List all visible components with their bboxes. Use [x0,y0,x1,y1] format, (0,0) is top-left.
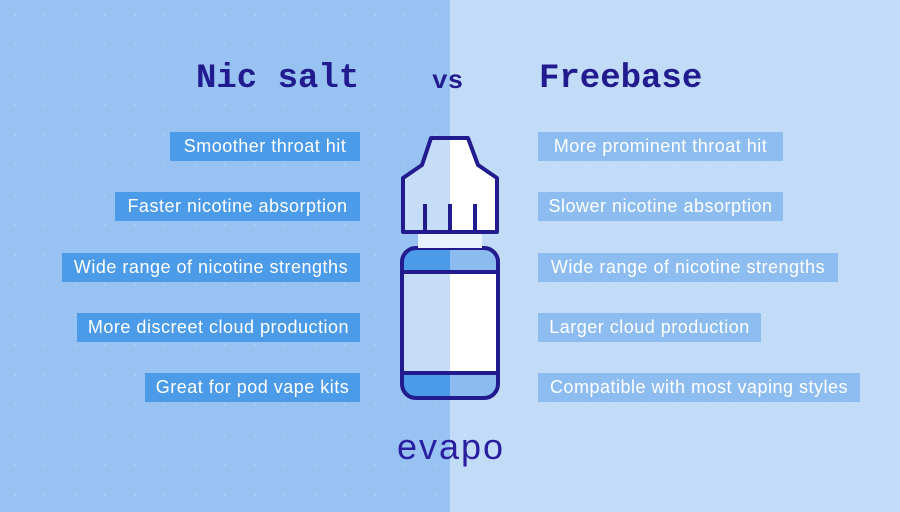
label: wide range [538,253,838,282]
logo: evapo: evapo [397,426,505,467]
label: pod kits [145,373,360,402]
label: compatible [538,373,860,402]
panel: freebase labels [538,132,860,402]
label: wide range: Wide range of nicotine strengths [74,257,348,277]
label: discreet: More discreet cloud production [88,317,349,337]
label: prominent [538,132,783,161]
label: faster [115,192,360,221]
label: slower: Slower nicotine absorption [548,196,773,216]
panel: nic salt labels [62,132,360,402]
title: Freebase: Freebase [539,60,702,98]
label: pod kits: Great for pod vape kits [156,377,349,397]
label: wide range: Wide range of nicotine strengths [551,257,825,277]
icon: bottle [400,136,500,400]
title: vs: vs [432,66,463,96]
label: larger cloud: Larger cloud production [549,317,750,337]
label: faster: Faster nicotine absorption [127,196,348,216]
label: smoother: Smoother throat hit [184,136,346,156]
label: smoother [170,132,360,161]
label: compatible: Compatible with most vaping styles [550,377,848,397]
label: wide range [62,253,360,282]
label: slower [538,192,783,221]
label: larger cloud [538,313,761,342]
label: prominent: More prominent throat hit [554,136,767,156]
title: Nic salt: Nic salt [196,60,359,98]
label: discreet [77,313,360,342]
